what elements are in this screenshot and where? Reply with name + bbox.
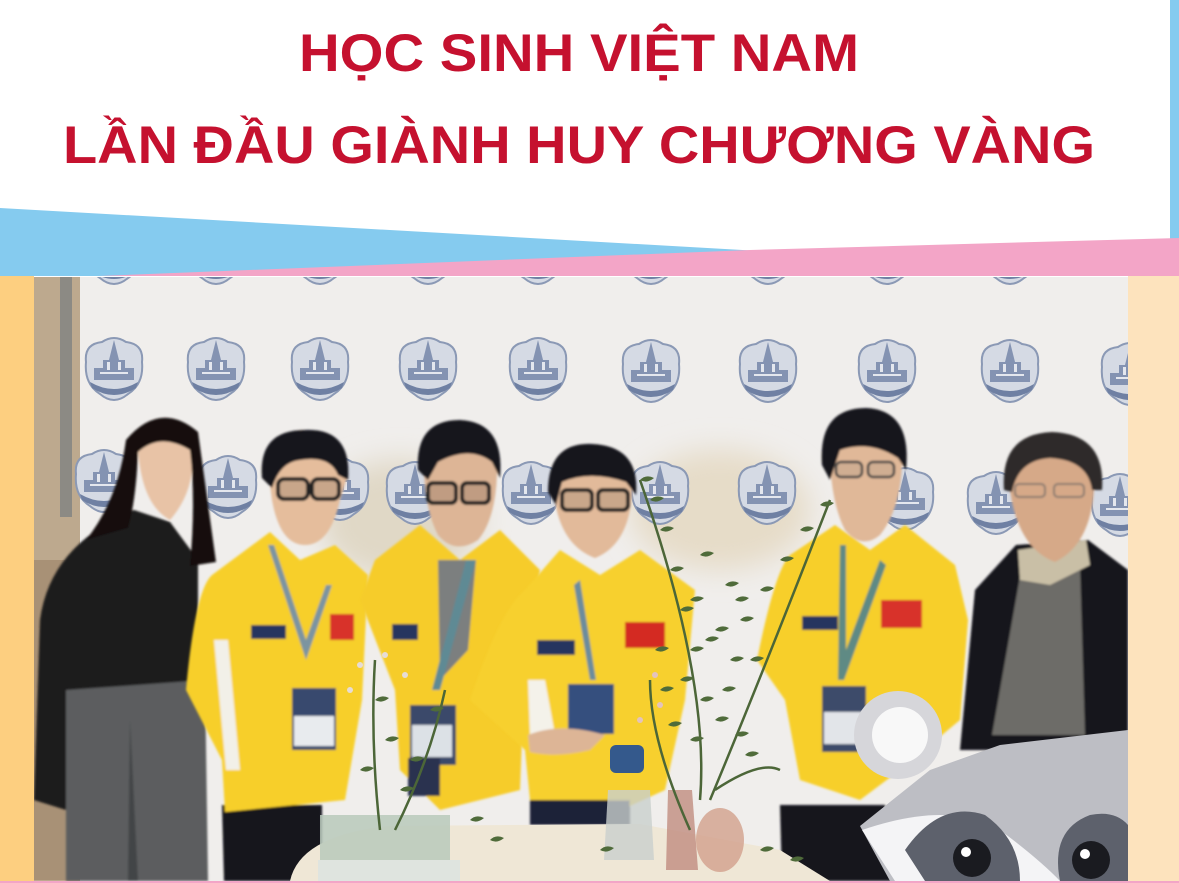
person: student 4 (757, 408, 968, 881)
person: student 3 (520, 442, 696, 825)
photo backdrop wall (34, 277, 1128, 881)
person: woman in black (34, 418, 216, 881)
title (63, 22, 1095, 175)
person: man in dark jacket (960, 432, 1128, 750)
title: LẦN ĐẦU GIÀNH HUY CHƯƠNG VÀNG (63, 115, 1095, 175)
header ribbon: blue and pink bands (0, 0, 1179, 276)
side strips (0, 276, 1179, 883)
photo: Vietnamese students team group portrait (34, 277, 1128, 881)
person: student 1 (186, 430, 368, 881)
title: HỌC SINH VIỆT NAM (299, 22, 859, 83)
backdrop emblems (76, 222, 1158, 536)
flower arrangement (347, 476, 834, 862)
table with glassware (290, 745, 830, 881)
person: student 2 (360, 420, 540, 810)
mascot: raccoon (854, 691, 1128, 881)
